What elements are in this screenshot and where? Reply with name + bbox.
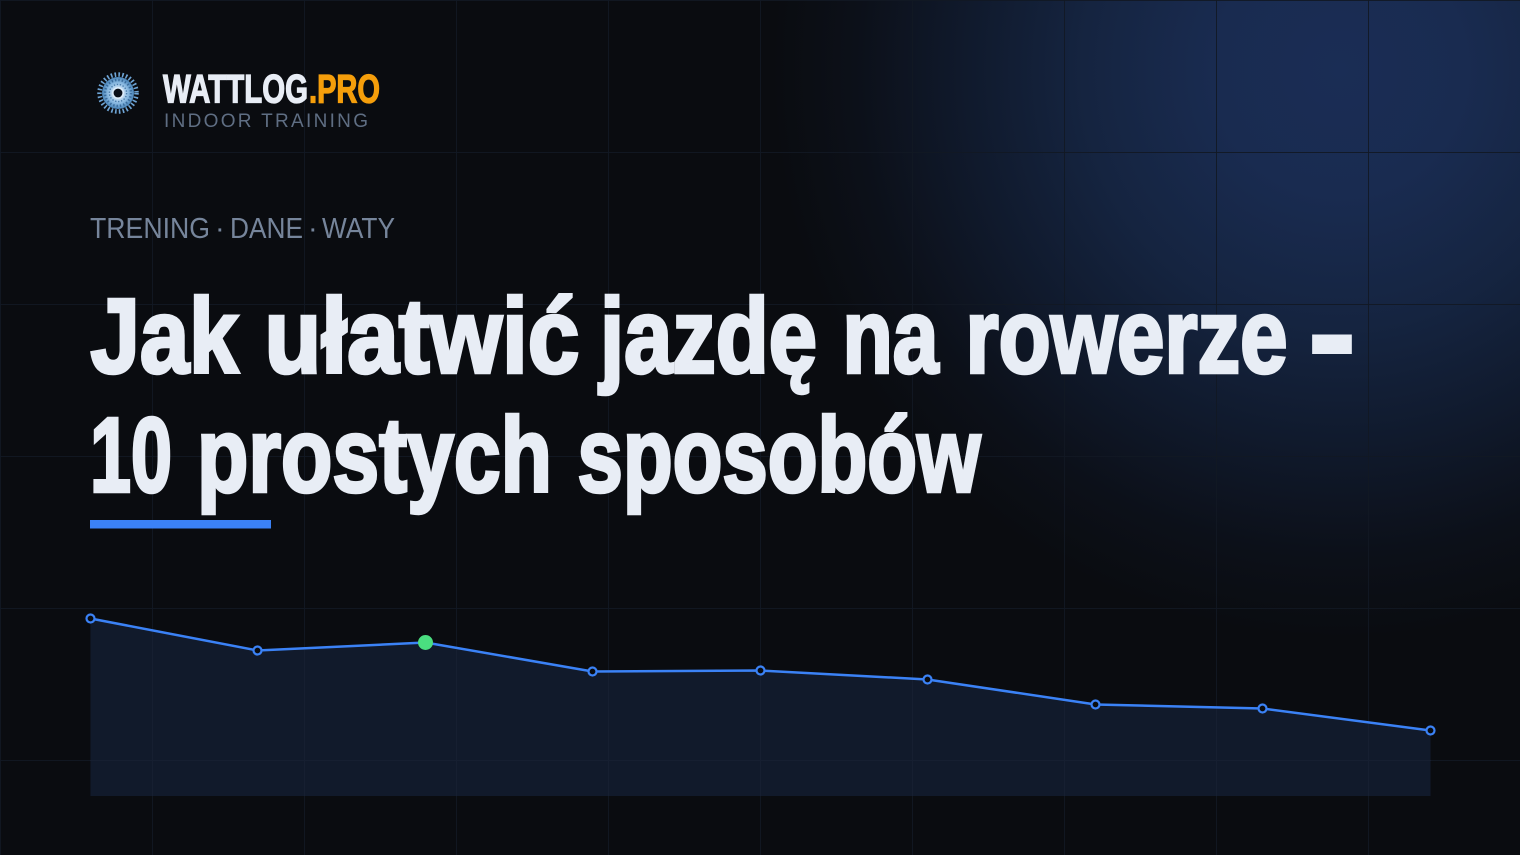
logo subtitle: INDOOR TRAINING: [164, 111, 368, 132]
title: [90, 278, 1351, 514]
chart line: [90, 618, 1430, 730]
title line 2: prostych: [197, 396, 552, 514]
logo icon: cassette: [100, 74, 136, 112]
title line 1: na: [842, 278, 939, 396]
title line 1: rowerze: [966, 278, 1288, 396]
chart markers: [86, 614, 1434, 734]
title line 1: ułatwić: [264, 278, 580, 396]
logo wordmark: WATTLOG: [163, 68, 308, 112]
highlighted point: [418, 635, 433, 650]
eyebrow: DANE: [230, 213, 303, 245]
eyebrow: ·: [308, 213, 318, 245]
title line 2: [90, 396, 981, 514]
title line 1: –: [1313, 278, 1351, 396]
logo wordmark: .PRO: [309, 68, 380, 112]
chart area: [90, 618, 1430, 796]
eyebrow: WATY: [322, 213, 395, 245]
title line 1: jazdę: [598, 278, 817, 396]
eyebrow: TRENING: [90, 213, 210, 245]
eyebrow: ·: [215, 213, 225, 245]
title line 2: sposobów: [578, 396, 981, 514]
eyebrow: [90, 213, 395, 245]
title underline: [90, 520, 271, 528]
title line 1: [90, 278, 1351, 396]
title line 2: 10: [90, 396, 172, 514]
title line 1: Jak: [90, 278, 239, 396]
